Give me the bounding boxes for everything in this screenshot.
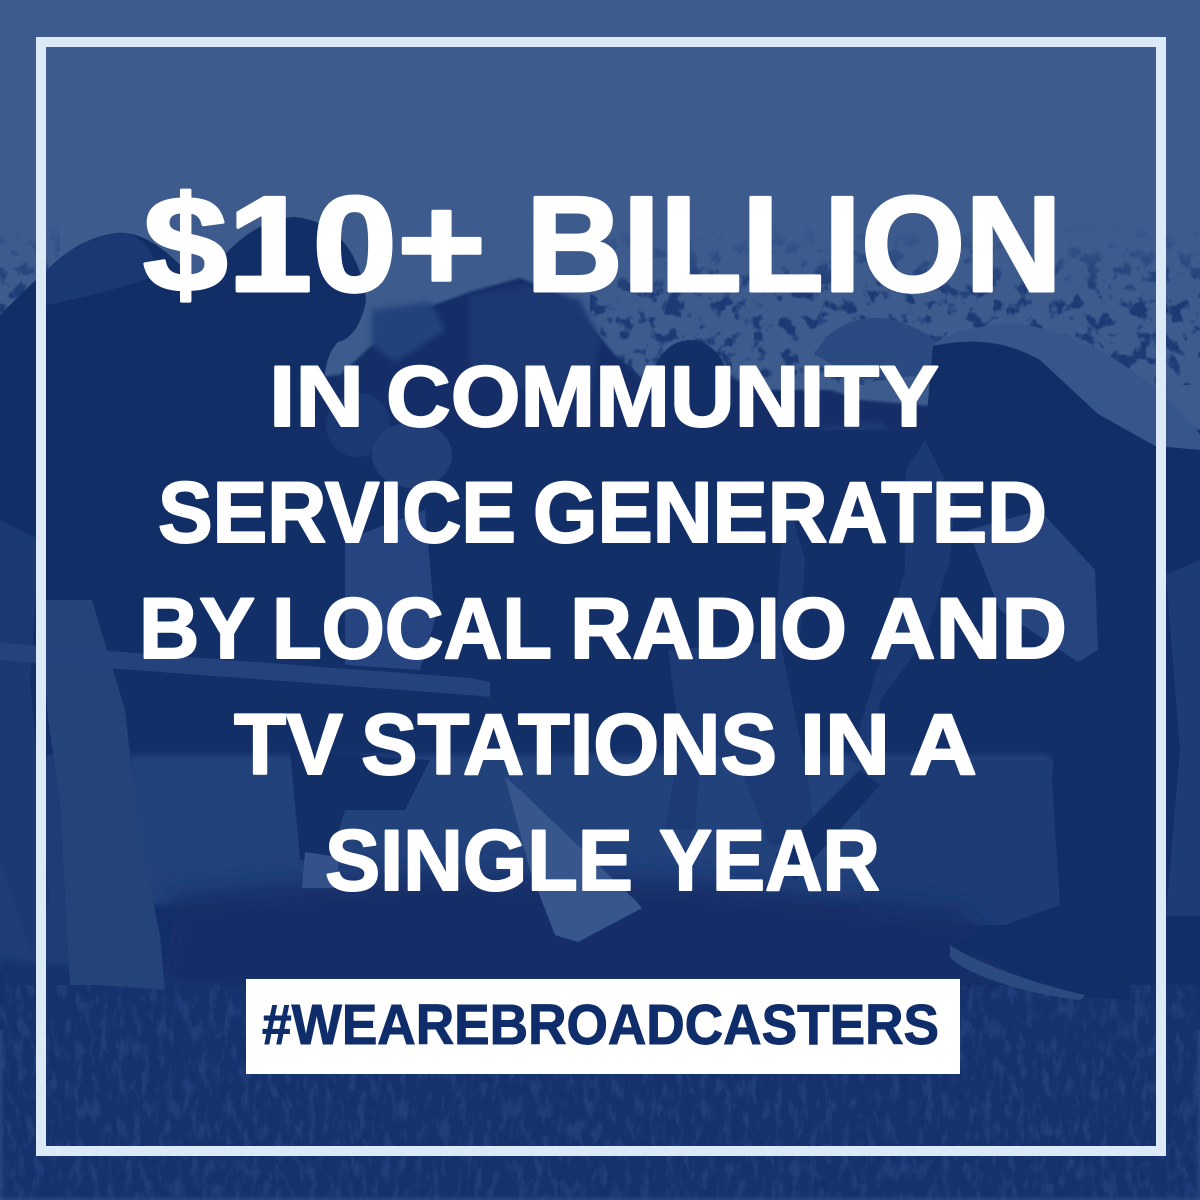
back highlight — [45, 233, 154, 305]
sock — [302, 852, 338, 888]
body statement: IN — [800, 697, 890, 793]
legs — [40, 600, 165, 990]
shirt patch — [968, 510, 1098, 662]
centre dark soil — [150, 870, 1020, 1000]
headline: $10+ BILLION: $10+ — [143, 168, 486, 320]
torso — [587, 430, 792, 590]
shorts and legs — [665, 640, 815, 845]
right man — [815, 318, 1200, 1000]
headline: $10+ BILLION — [143, 168, 1062, 320]
grass texture — [0, 985, 1200, 1200]
body statement: IN — [269, 349, 364, 445]
centre man — [587, 340, 815, 845]
body statement: LOCAL — [272, 581, 552, 677]
body statement: STATIONS — [361, 697, 777, 793]
body statement: SERVICE — [158, 465, 516, 561]
left-edge lawn — [0, 755, 130, 970]
blond head — [372, 422, 452, 488]
body statement: BY — [139, 581, 255, 677]
foreground grass — [0, 960, 1200, 1200]
body statement: TV — [234, 697, 343, 793]
upper body — [0, 217, 366, 645]
foliage leaves — [372, 302, 445, 362]
dark body — [925, 342, 1200, 1000]
arm — [850, 440, 955, 770]
body statement: SINGLE — [325, 813, 633, 909]
shovel blade — [505, 777, 642, 942]
hair — [815, 318, 935, 380]
dark-haired head — [326, 393, 390, 457]
kid in plaid shirt — [290, 393, 452, 888]
sleeve — [933, 324, 1200, 450]
body statement: RADIO — [570, 581, 847, 677]
plaid shirt — [345, 510, 435, 670]
raised arm — [775, 490, 805, 640]
body statement: COMMUNITY — [386, 349, 939, 445]
left man — [0, 217, 366, 990]
dark shorts and legs — [290, 750, 430, 860]
far leg — [1166, 560, 1200, 916]
speckled tree tops — [0, 242, 1200, 385]
body statement: A — [909, 697, 977, 793]
body statement: YEAR — [659, 813, 880, 909]
hashtag badge — [246, 979, 960, 1074]
tool handle — [775, 770, 880, 880]
hedge — [0, 278, 1200, 800]
left leg — [0, 520, 50, 950]
body statement: AND — [870, 581, 1067, 677]
right-side lawn — [860, 760, 1060, 925]
body statement: GENERATED — [533, 465, 1047, 561]
lawn band — [130, 755, 1050, 905]
mid-ground — [0, 430, 1200, 1030]
shovel handle — [0, 643, 490, 697]
shoe sole — [950, 945, 1085, 1000]
body statement — [139, 349, 1067, 909]
headline: $10+ BILLION: BILLION — [526, 168, 1062, 320]
head — [652, 340, 728, 430]
hashtag badge: #WEAREBROADCASTERS — [262, 993, 939, 1057]
